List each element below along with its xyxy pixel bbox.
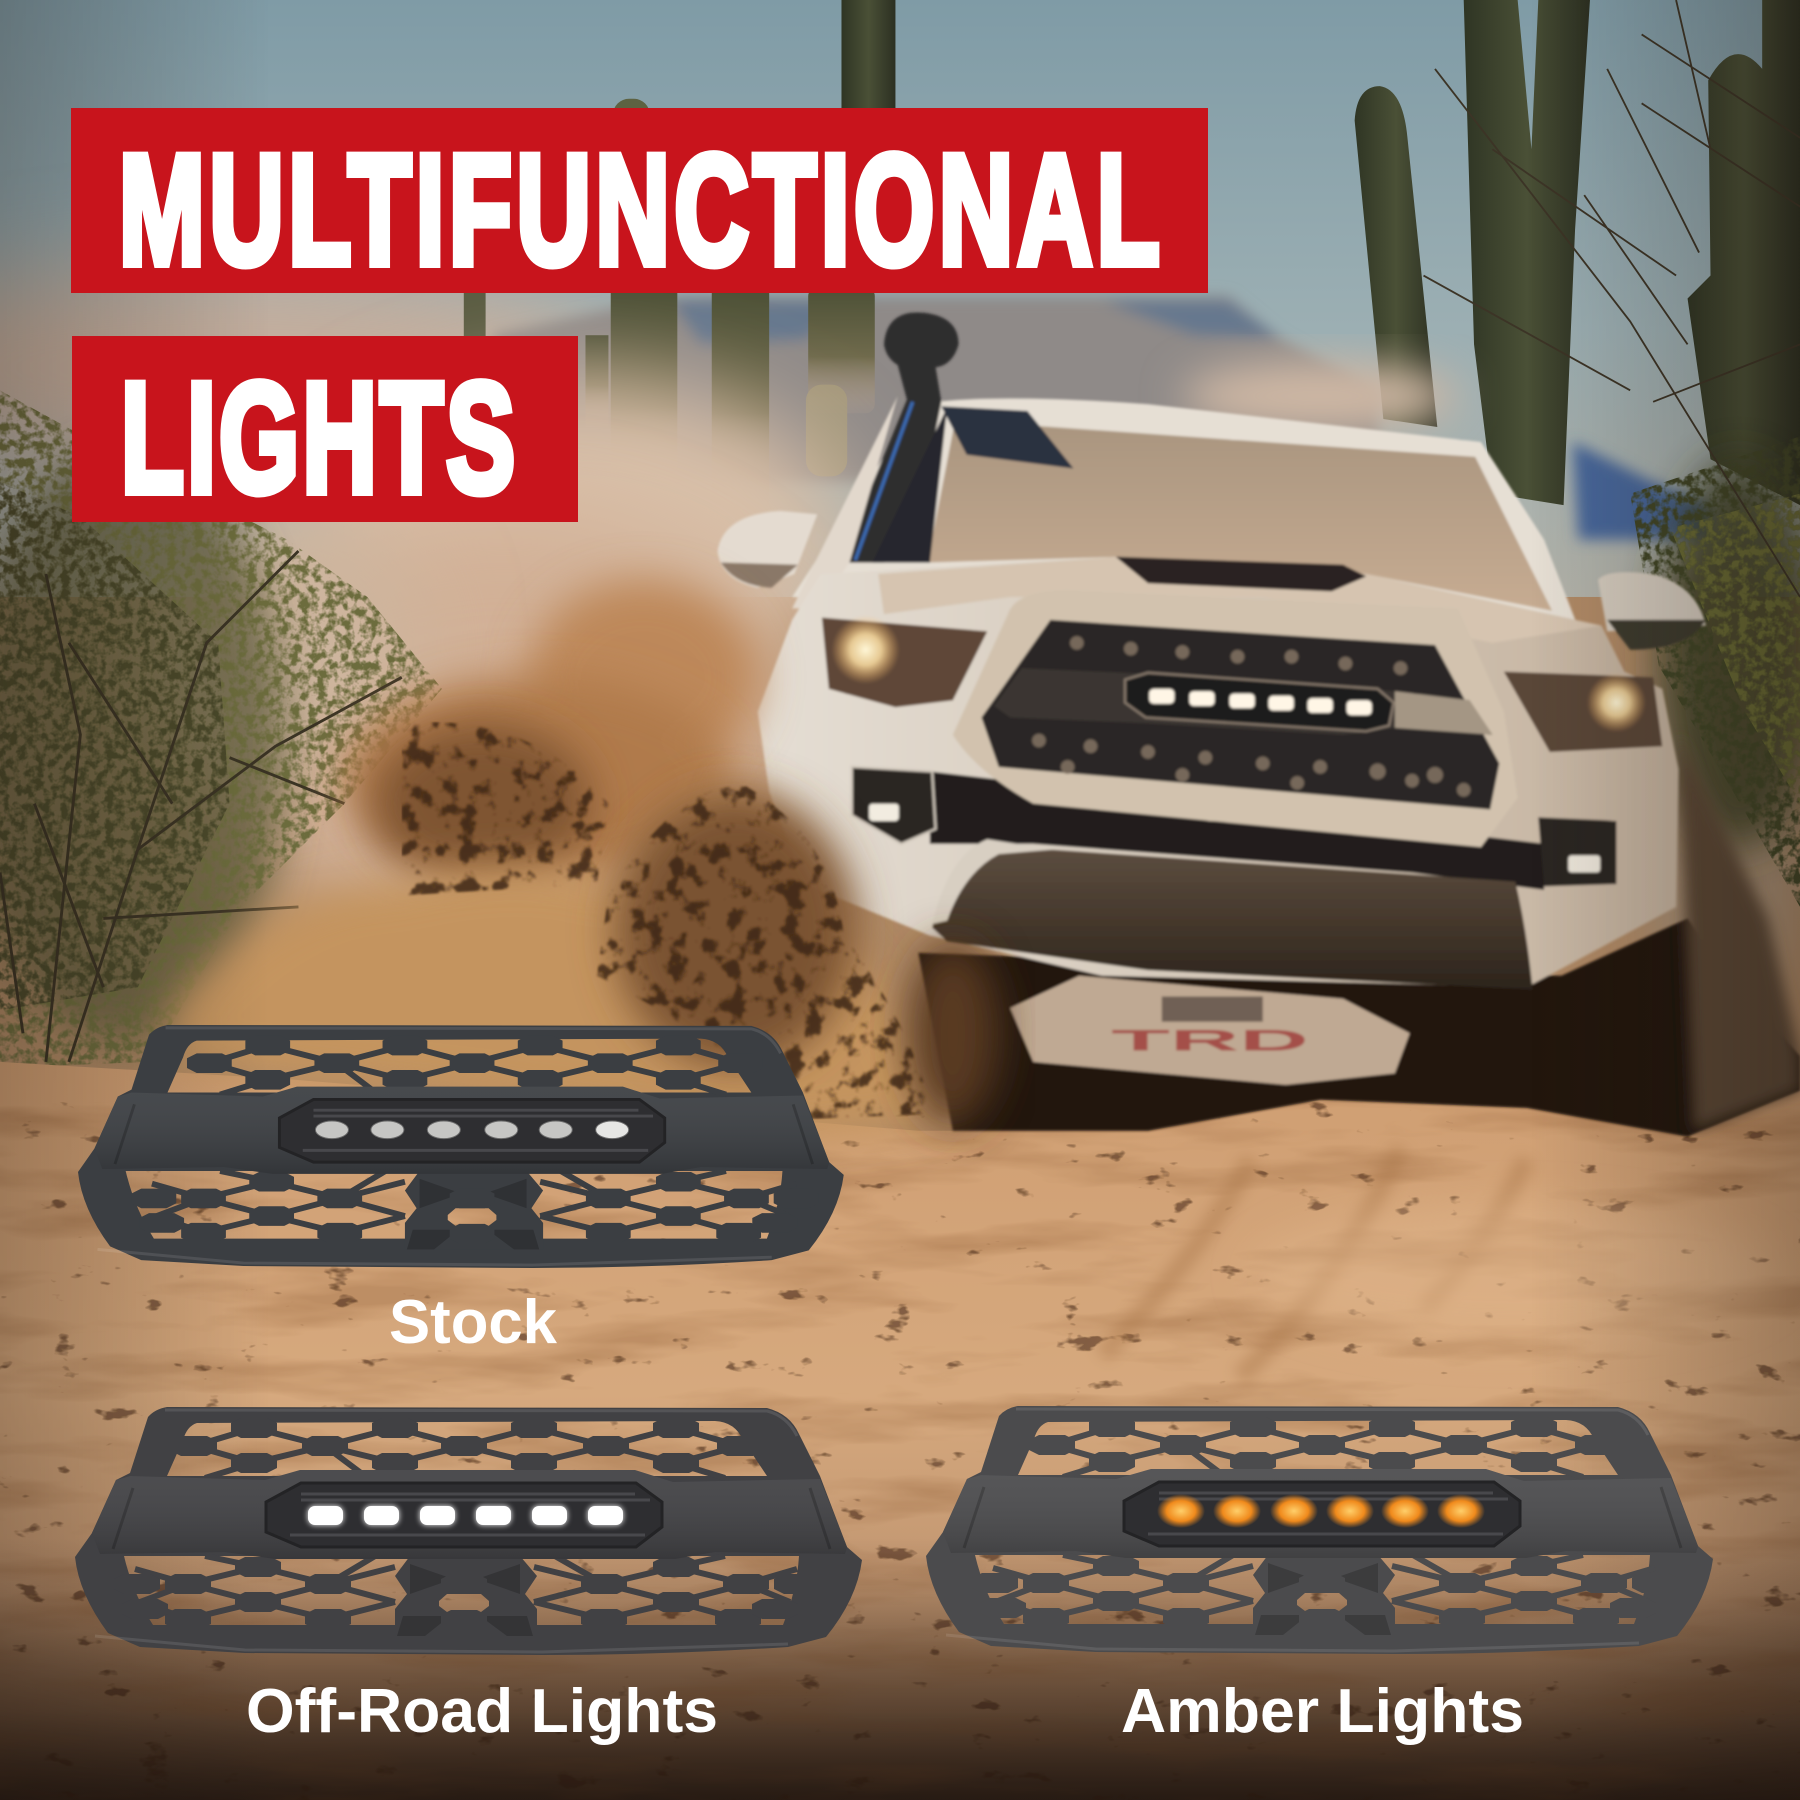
lower bumper [932,839,1533,990]
truck [718,312,1800,1137]
grille surround [953,590,1518,847]
title banner: line 2: LIGHTS [121,351,518,526]
body [758,557,1678,987]
left headlight [822,615,987,707]
horizon haze [0,264,620,471]
grille: off-road lights [75,1407,862,1655]
left mirror [718,511,817,588]
hood scoop [1116,557,1366,591]
distant mountains [494,296,1711,540]
label: off-road lights: Off-Road Lights [246,1676,718,1746]
right mirror [1598,572,1706,650]
label: amber lights: Amber Lights [1121,1676,1524,1746]
lower black intake band [930,771,1544,890]
white LEDs [308,1506,623,1525]
skid plate [1010,976,1410,1085]
label: stock: Stock [389,1288,558,1357]
right tree foliage [1424,0,1800,907]
rising dust cloud [149,362,1800,1056]
cab roof and windshield [792,398,1584,643]
hood [878,557,1601,643]
left bush [0,390,442,1068]
amber LEDs [1157,1494,1485,1528]
right dust shadow [1678,735,1800,1131]
stock LED lenses [315,1121,629,1139]
bottom vignette [0,1538,1800,1800]
snorkel and A pillar [792,312,1073,608]
undercarriage shadow and tire [918,918,1800,1137]
left fog pocket [852,767,936,844]
foreground dirt plume [172,580,999,1137]
truck grille [982,620,1499,809]
right headlight [1504,672,1662,752]
right fog pocket [1538,817,1616,886]
skid plate: TRD [1111,1024,1309,1057]
sand ground [0,1062,1800,1800]
grille: amber lights [926,1406,1713,1654]
tire tracks [1102,1148,1527,1378]
sky [0,0,1800,597]
title banner: line 1: MULTIFUNCTIONAL [119,123,1164,298]
back cacti [464,0,1800,517]
grille: stock [78,1025,844,1268]
